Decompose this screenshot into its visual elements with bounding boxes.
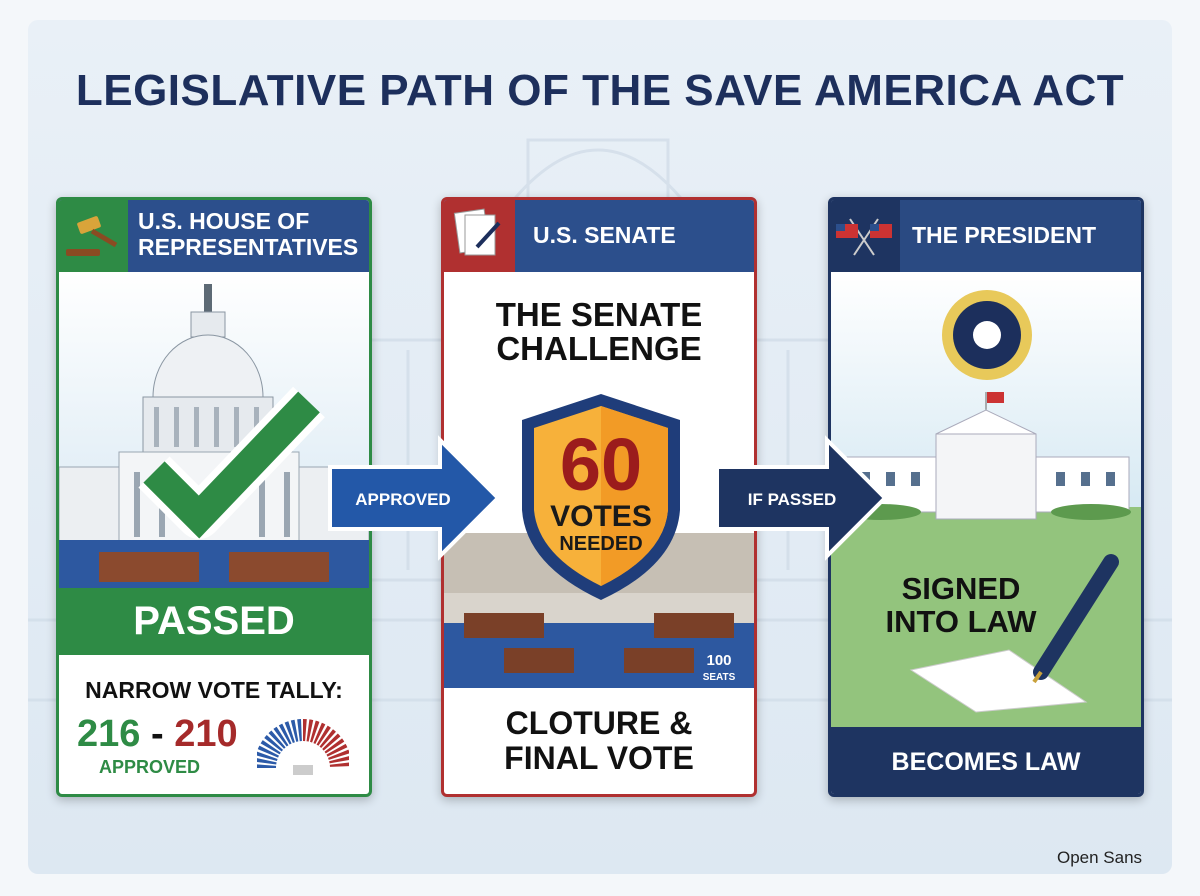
arrow: approved: APPROVED	[355, 490, 451, 509]
illustration: senate chamber	[444, 533, 754, 688]
icon: crossed flags	[828, 197, 900, 272]
header: president: THE PRESIDENT	[912, 222, 1096, 248]
icon: gavel	[56, 197, 128, 272]
banner: becomes law	[831, 727, 1141, 797]
heading: senate challenge	[496, 296, 702, 367]
text: cloture & final vote	[504, 705, 694, 776]
chart: hemicycle	[257, 719, 349, 775]
badge: 60 votes shield	[522, 394, 680, 600]
badge: 60 votes shield: NEEDED	[559, 533, 643, 555]
banner: passed	[59, 588, 369, 655]
footer note: Open Sans	[1057, 848, 1142, 867]
header: president	[828, 197, 1144, 272]
arrow: if passed: IF PASSED	[748, 490, 836, 509]
vote tally: NARROW VOTE TALLY:	[85, 677, 343, 703]
header: house: REPRESENTATIVES	[138, 234, 358, 260]
illustration: senate chamber: SEATS	[703, 672, 736, 683]
heading: senate challenge: THE SENATE	[496, 296, 702, 333]
vote tally: APPROVED	[99, 757, 200, 777]
illustration: white house lawn	[831, 290, 1141, 727]
illustration: capitol with checkmark	[59, 284, 369, 588]
panel: house	[56, 197, 372, 797]
header: house	[56, 197, 372, 272]
banner: becomes law: BECOMES LAW	[892, 748, 1080, 776]
arrow: if passed	[719, 435, 882, 561]
icon: presidential seal	[942, 290, 1032, 380]
text: cloture & final vote: FINAL VOTE	[504, 740, 694, 776]
illustration: senate chamber: 100	[706, 652, 732, 669]
illustration: white house lawn: INTO LAW	[886, 604, 1037, 639]
icon: checkmark	[154, 402, 309, 517]
illustration: white house lawn: SIGNED	[902, 571, 1020, 606]
header: senate: U.S. SENATE	[533, 222, 676, 248]
banner: passed: PASSED	[133, 599, 295, 643]
header: house: U.S. HOUSE OF	[138, 208, 309, 234]
vote tally	[77, 677, 349, 777]
heading: senate challenge: CHALLENGE	[496, 330, 702, 367]
icon: document and pen	[911, 650, 1086, 712]
text: cloture & final vote: CLOTURE &	[506, 705, 692, 741]
badge: 60 votes shield: VOTES	[550, 500, 652, 533]
panel: senate	[441, 197, 757, 797]
title: LEGISLATIVE PATH OF THE SAVE AMERICA ACT	[76, 66, 1124, 115]
badge: 60 votes shield: 60	[560, 423, 642, 506]
header: senate	[441, 197, 757, 272]
vote tally: 216 - 210	[77, 713, 238, 755]
panel: president	[828, 197, 1144, 797]
icon: document	[441, 197, 515, 272]
arrow: approved	[328, 435, 496, 561]
